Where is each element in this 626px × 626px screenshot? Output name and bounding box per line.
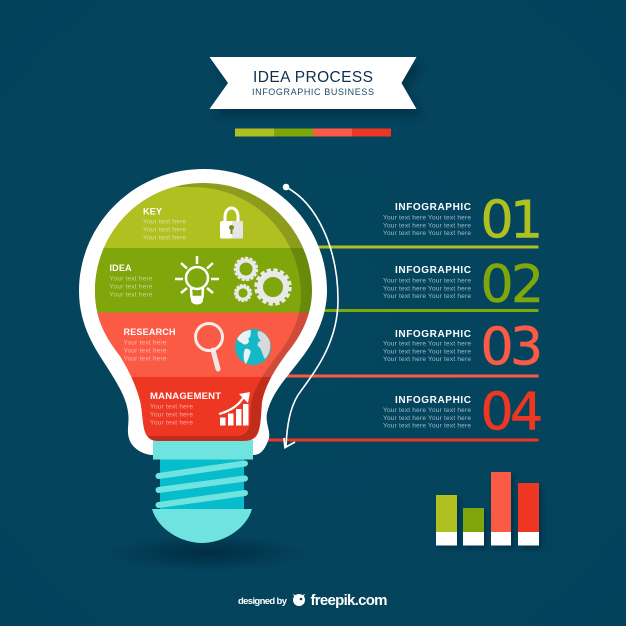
row 2 text: Your text here Your text here [383,293,471,300]
row 2 text: INFOGRAPHIC [395,265,471,276]
row 4 text: Your text here Your text here [383,422,471,430]
row 4 text: Your text here Your text here [383,407,471,414]
panel: idea: Your text here [110,292,153,298]
row 1 text: Your text here Your text here [383,230,471,237]
icon: light bulb [175,256,219,304]
row divider lines [260,246,538,442]
panel: management [150,391,250,426]
panel: research: Your text here [124,348,167,354]
row 2 text [383,255,544,315]
row 3 text: Your text here Your text here [383,340,471,348]
row 4 text [383,382,543,442]
panel: key: KEY [143,206,162,216]
title banner [210,57,423,117]
row 4 text: INFOGRAPHIC [395,395,471,406]
panel: research: Your text here [124,356,167,362]
panel: key: Your text here [143,226,186,234]
bulb collar [153,440,253,460]
row 3 text: Your text here Your text here [383,356,471,363]
row 1 text [383,190,543,250]
panel: management: Your text here [150,420,193,426]
row 3 text: Your text here Your text here [383,348,471,356]
row 1 text: Your text here Your text here [383,214,471,222]
icon: globe [235,329,271,365]
footer credit [238,592,388,609]
row 4 text: Your text here Your text here [383,415,471,422]
row 2 text: Your text here Your text here [383,278,471,284]
number 02: 02 [480,255,544,315]
panel: idea: IDEA [110,263,132,273]
icon: padlock [220,208,243,238]
panel: idea: Your text here [110,284,153,290]
bulb coloured body [95,183,312,441]
panel: key: Your text here [143,234,186,242]
footer credit: designed by [238,596,288,607]
row 2 text: Your text here Your text here [383,286,471,292]
title text: IDEA PROCESS [253,69,373,86]
panel: idea [110,256,290,304]
number 03: 03 [480,318,543,378]
curved arrow [284,184,338,448]
panel: management: MANAGEMENT [150,391,221,402]
bulb white outline [79,169,327,455]
ground shadow under the bulb [108,535,308,571]
row 3 text: INFOGRAPHIC [395,329,471,340]
footer credit: freepik.com [310,592,388,609]
panel: management: Your text here [150,404,193,410]
bulb screw base [152,459,252,543]
panel: research [124,324,271,369]
row 1 text: INFOGRAPHIC [395,202,471,213]
icon: magnifying glass [196,324,222,369]
panel: research: Your text here [124,340,167,346]
icon: freepik logo [293,594,305,606]
subtitle text: INFOGRAPHIC BUSINESS [252,87,374,97]
panel: key [143,206,243,242]
colour strip under the title [235,128,391,136]
number 04: 04 [480,382,543,442]
panel: management: Your text here [150,412,193,418]
row 1 text: Your text here Your text here [383,222,471,230]
icon: growth chart [219,392,250,426]
panel: key: Your text here [143,218,186,226]
bar chart [436,472,542,549]
panel: idea: Your text here [110,276,153,282]
row 3 text [383,318,543,378]
number 01: 01 [480,190,543,250]
icon: gears [235,258,290,304]
panel: research: RESEARCH [124,327,176,337]
